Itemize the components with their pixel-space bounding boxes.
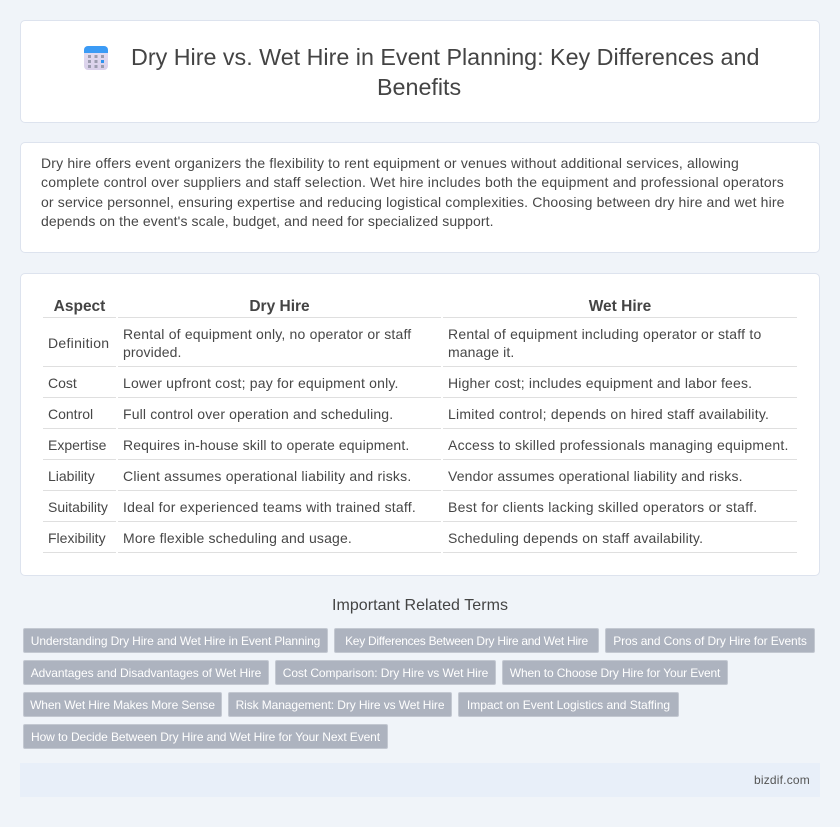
icon: calendar [84,46,108,70]
table: Definition [48,335,109,351]
intro text: depends on the event's scale, budget, and need for specialized support. [41,213,494,229]
related terms tags: Key Differences Between Dry Hire and Wet Hire [345,634,588,648]
table: manage it. [448,344,514,360]
table: Vendor assumes operational liability and risks. [448,468,743,484]
table: Control [48,406,93,422]
table: Flexibility [48,530,106,546]
table: Liability [48,468,95,484]
table: Rental of equipment including operator or staff to [448,326,761,342]
table: Wet Hire [589,298,651,315]
comparison table panel [20,273,820,576]
table: Access to skilled professionals managing equipment. [448,437,789,453]
footer bar [20,763,820,797]
related terms tags [23,628,815,749]
related terms tags: When Wet Hire Makes More Sense [30,698,215,712]
table: Cost [48,375,77,391]
table: Aspect [54,298,105,315]
table: Expertise [48,437,106,453]
related terms tags: Impact on Event Logistics and Staffing [467,698,670,712]
table: More flexible scheduling and usage. [123,530,352,546]
related terms heading: Important Related Terms [332,597,508,614]
intro text [41,155,785,229]
table: Lower upfront cost; pay for equipment only. [123,375,399,391]
table: Best for clients lacking skilled operators or staff. [448,499,757,515]
table: Ideal for experienced teams with trained staff. [123,499,416,515]
related terms tags: When to Choose Dry Hire for Your Event [510,666,720,680]
intro text: Dry hire offers event organizers the flexibility to rent equipment or venues without additional services, allowing [41,155,739,171]
footer site name: bizdif.com [754,773,810,787]
title: Dry Hire vs. Wet Hire in Event Planning: Key Differences and [131,44,759,70]
title [131,44,759,100]
title: Benefits [377,74,461,100]
related terms tags: Cost Comparison: Dry Hire vs Wet Hire [283,666,488,680]
intro text: complete control over suppliers and staff selection. Wet hire includes both the equipment and professional operators [41,174,784,190]
table: Suitability [48,499,108,515]
table: Requires in-house skill to operate equipment. [123,437,409,453]
header panel [20,20,820,123]
table: provided. [123,344,182,360]
table: Dry Hire [249,298,310,315]
related terms tags: Risk Management: Dry Hire vs Wet Hire [236,698,444,712]
related terms tags: How to Decide Between Dry Hire and Wet Hire for Your Next Event [31,730,380,744]
table: Higher cost; includes equipment and labor fees. [448,375,752,391]
related terms tags: Understanding Dry Hire and Wet Hire in Event Planning [31,634,320,648]
related terms tags: Advantages and Disadvantages of Wet Hire [31,666,261,680]
table: Scheduling depends on staff availability. [448,530,703,546]
intro text: or service personnel, ensuring expertise and reducing logistical complexities. Choosing between dry hire and wet hire [41,194,785,210]
related terms tags: Pros and Cons of Dry Hire for Events [613,634,807,648]
table: Limited control; depends on hired staff availability. [448,406,769,422]
table: Client assumes operational liability and risks. [123,468,411,484]
table: Full control over operation and scheduling. [123,406,393,422]
table: Rental of equipment only, no operator or staff [123,326,411,342]
table [43,298,797,553]
intro panel [20,142,820,253]
